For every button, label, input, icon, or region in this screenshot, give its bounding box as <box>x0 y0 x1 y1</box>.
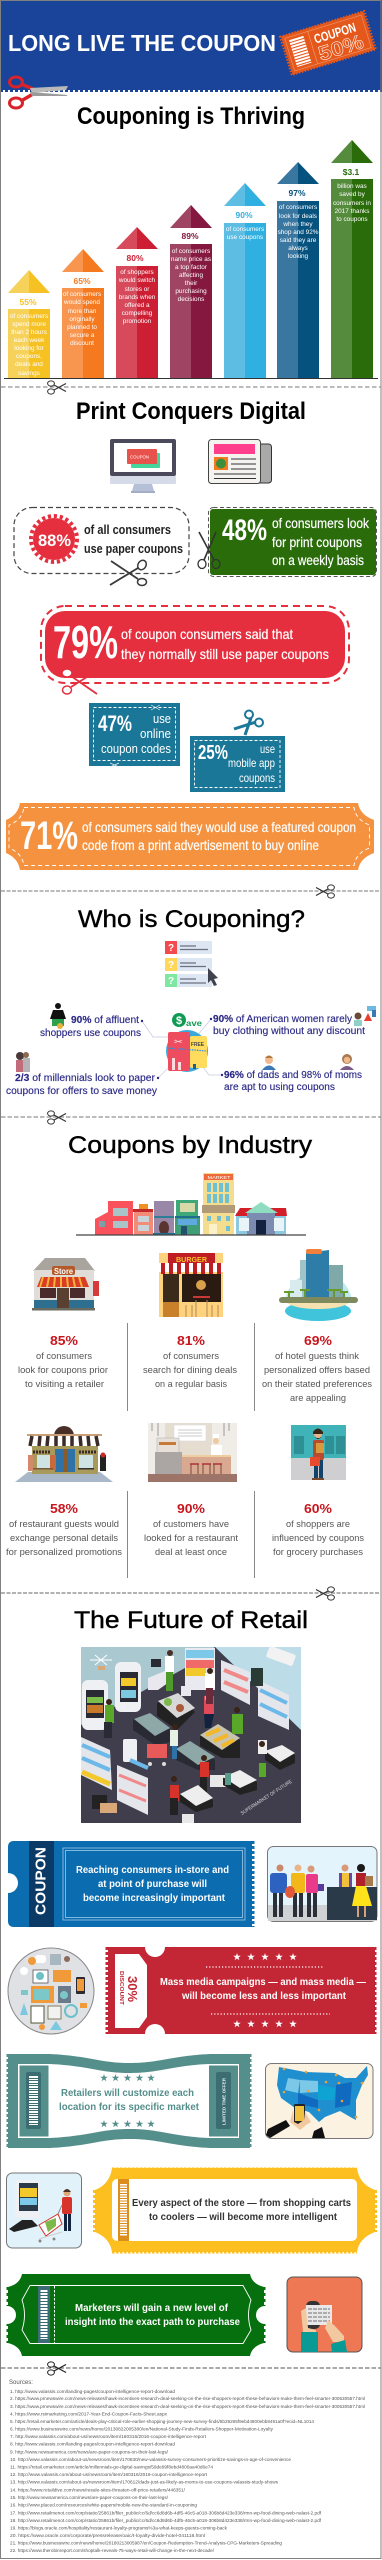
sources: 8. http://www.valassis.com/landing-pages/coupon-intelligence-report-download <box>10 2442 175 2446</box>
icon: scissors divider 5 <box>48 2362 66 2375</box>
heading: Couponing is Thriving: Couponing is Thriving <box>77 103 305 130</box>
arrow: 89%: decisions <box>178 296 204 303</box>
callout: 47%: use <box>153 711 171 726</box>
icon: dad <box>262 1056 276 1070</box>
sources: 12. http://www.valassis.com/about-us/newsroom/item/160316/2016-coupon-intelligence-report <box>10 2472 208 2477</box>
text: millennials: 2/3 of millennials look to paper <box>15 1073 156 1084</box>
ticket: marketers <box>0 2274 274 2356</box>
callout: 79%: 79% <box>53 616 118 668</box>
image: smart cooler with cart <box>6 2173 82 2248</box>
arrow: 90%: 90% <box>235 210 253 220</box>
callout: 71%: code from a print advertisement to buy online <box>82 837 319 853</box>
callout: 88%: of all consumers <box>84 522 171 537</box>
callout: 48% <box>208 508 376 576</box>
stat: 81%: of consumers <box>163 1351 219 1362</box>
icon: millennial couple <box>16 1052 30 1072</box>
image: future supermarket: SUPERMARKET OF FUTURE <box>240 1779 294 1817</box>
stat: 85%: 85% <box>50 1333 78 1348</box>
icon: save coupons circle: $ <box>176 1015 182 1027</box>
sources: 7. http://www.valassis.com/about-us/newsroom/item/160316/2016-coupon-intelligence-report <box>10 2434 207 2439</box>
callout: 47%: coupon codes <box>101 741 171 756</box>
ticket: retailers: location for its specific market <box>59 2101 199 2113</box>
callout: 25% <box>190 736 285 792</box>
arrow: 55%: than 2 hours <box>11 329 47 336</box>
callout: 47%: online <box>140 726 171 741</box>
text: American women <box>210 1014 365 1037</box>
arrow: 89%: 89% <box>181 231 199 241</box>
arrow: 89% <box>170 205 212 378</box>
ticket: mass media: 30% <box>125 1976 140 2002</box>
sources: Sources: <box>9 2379 33 2386</box>
connectors <box>142 1019 222 1078</box>
sources: 11. https://retail.emarketer.com/article/millennials-go-digital-savings/59de99f8ebd4800aa40d6e74 <box>10 2464 213 2470</box>
stat: 69%: on their stated preferences <box>262 1379 372 1390</box>
text: affluent shoppers: shoppers use coupons <box>40 1028 141 1039</box>
stat: 58% <box>6 1501 122 1558</box>
heading: Print Conquers Digital: Print Conquers Digital <box>76 398 306 425</box>
text: dads and moms: 96% of dads and 98% of moms <box>224 1070 362 1081</box>
sources: 21. https://www.businesswire.com/news/home/20180213005987/en/Coupon-Redemption-Trend-Analysis-CPG-Marketers-Spreading <box>10 2540 282 2546</box>
icon: street of shops: MARKET <box>208 1175 231 1180</box>
stat: 85%: of consumers <box>36 1351 92 1362</box>
stat: 69%: of hotel guests think <box>275 1351 359 1362</box>
text: affluent shoppers <box>40 1015 143 1039</box>
icon: blue scissors <box>234 710 263 735</box>
arrow: 89%: their <box>185 280 198 287</box>
icon: question list <box>165 941 218 987</box>
ticket: mass media <box>107 1937 375 2044</box>
icon: monitor <box>110 439 176 493</box>
stat: 90% restaurant: deal at least once <box>155 1547 227 1558</box>
image: checkout queue <box>268 1846 377 1922</box>
icon: cafe <box>15 1426 113 1482</box>
text: American women: buy clothing without any discount <box>213 1026 365 1037</box>
icon: mom <box>340 1054 354 1070</box>
ticket: every aspect: to coolers — will become more intelligent <box>149 2211 337 2223</box>
stat: 81% <box>143 1333 237 1390</box>
callout: 79%: they normally still use paper coupons <box>121 646 329 662</box>
arrow: 97%: said they are <box>280 237 317 244</box>
icon: scissors divider 1 <box>48 381 66 394</box>
icon: store: Store <box>54 1267 74 1276</box>
ticket: reaching consumers: COUPON <box>32 1847 49 1915</box>
stat: 60%: for grocery purchases <box>273 1547 363 1558</box>
icon: scissors divider 3 <box>48 1111 66 1124</box>
arrow: 89%: purchasing <box>175 288 207 295</box>
arrow: 90%: use coupons <box>227 234 263 241</box>
icon: question list: ? <box>168 976 174 987</box>
sources: 3. https://www.prnewswire.com/news-releases/hawk-incentives-research-deal-seeking-on-the-rise-shoppers-report-these-behaviors-make-them-feel-smarter-300530557.html <box>10 2404 365 2409</box>
ticket: reaching consumers: at point of purchase will <box>98 1878 207 1890</box>
icon: street of shops <box>76 1173 306 1235</box>
callout: 25%: 25% <box>198 742 228 764</box>
arrow: 65%: more than <box>68 308 97 315</box>
text: affluent shoppers: 90% of affluent <box>71 1015 139 1026</box>
arrow: 90%: of consumers <box>226 226 264 233</box>
callout: 48%: 48% <box>222 514 267 547</box>
ticket: reaching consumers: Reaching consumers in-store and <box>76 1864 229 1876</box>
icon: save coupons circle: ✂ <box>174 1039 183 1046</box>
icon: orange coupon ticket: 50% <box>316 31 367 66</box>
icon: hotel <box>279 1249 358 1321</box>
icon: red scissors <box>10 77 68 108</box>
text: millennials <box>6 1073 159 1097</box>
icon: question list: ? <box>168 960 174 971</box>
icon: scissors on green box <box>198 532 220 568</box>
stat: 90% restaurant: of customers have <box>153 1519 229 1530</box>
icon: red scissors outline <box>62 669 98 694</box>
arrow: 55%: coupons, <box>16 353 42 360</box>
sources: 18. http://www.retailmenot.com/corp/static/25861b/filer_public/cc/6d/cc6d8d6b-4df5-46c5-a018-306b8d423e338/rmn-wp-food-dining-web-nalast-2.pdf <box>10 2518 322 2523</box>
stat: 69%: personalized offers based <box>264 1365 370 1376</box>
arrow: 97%: when they <box>282 221 313 228</box>
icon: scissors divider 2 <box>316 885 334 898</box>
stat: 58%: of restaurant guests would <box>9 1519 119 1530</box>
stat: 60%: influenced by coupons <box>272 1533 364 1544</box>
ticket: every aspect: Every aspect of the store — from shopping carts <box>132 2197 351 2209</box>
sources: 10. http://www.valassis.com/about-us/newsroom/item/170830/new-valassis-survey-consumers-prioritize-savings-in-age-of-convenience <box>10 2457 291 2462</box>
arrow: 65%: would spend <box>63 299 100 306</box>
arrow: $3.1: consumers in <box>333 200 371 207</box>
image: US map with phone <box>266 2064 373 2138</box>
callout: 25%: coupons <box>239 771 275 785</box>
icon: burger shop: BURGER <box>176 1255 208 1264</box>
ticket: mass media: will become less and less important <box>181 1990 346 2002</box>
arrow: 90% <box>224 183 266 378</box>
arrow: 65%: secure a <box>70 332 95 339</box>
arrow: $3.1: to coupons <box>336 216 368 223</box>
arrow: 97%: shop and 92% <box>278 229 319 236</box>
stat: 58%: exchange personal details <box>10 1533 118 1544</box>
stat: 85%: look for coupons prior <box>18 1365 108 1376</box>
stat: 90% restaurant <box>144 1501 238 1558</box>
ticket: retailers: Retailers will customize each <box>61 2087 194 2099</box>
ticket: reaching consumers: become increasingly important <box>83 1892 225 1904</box>
text: dads and moms: are apt to using coupons <box>224 1082 335 1093</box>
arrow: 55% <box>8 270 50 378</box>
arrow: 55%: savings <box>18 370 40 377</box>
arrow: $3.1: $3.1 <box>343 167 360 177</box>
sources: 14. https://www.retaildive.com/news/resale-sites-threaten-off-price-retailers/446351/ <box>10 2488 186 2492</box>
icon: scissors divider 4 <box>316 1587 334 1600</box>
stat: 81%: on a regular basis <box>155 1379 227 1390</box>
title: LONG LIVE THE COUPON <box>8 30 276 56</box>
arrow: 55%: each week <box>14 337 45 344</box>
badge: 88%: 88% <box>38 531 71 550</box>
callout: 79% <box>41 606 349 694</box>
arrow: 80%: promotion <box>123 318 152 325</box>
icon: store <box>32 1258 99 1310</box>
ticket: every aspect <box>94 2168 376 2252</box>
image: media circle <box>8 1948 94 2034</box>
badge: 88% <box>31 516 77 562</box>
arrow: 65%: of consumers <box>63 291 101 298</box>
icon: scissors dark below 88% box <box>110 559 148 586</box>
icon: orange coupon ticket <box>280 11 376 75</box>
image: phone in hands <box>287 2277 362 2352</box>
arrow: 89%: a top factor <box>175 264 208 271</box>
callout: 25%: mobile app <box>228 756 275 770</box>
stat: 60% <box>272 1501 364 1558</box>
header banner <box>0 0 382 91</box>
arrow: 89%: of consumers <box>172 248 210 255</box>
arrow: 97% <box>277 162 319 378</box>
sources: 17. http://www.retailmenot.com/corp/static/25861b/filer_public/cc/6d/cc6d8d6b-4df5-46c5-a018-306b8d423e338/rmn-wp-food-dining-web-nalast-2.pdf <box>10 2510 322 2516</box>
stat: 58%: for personalized promotions <box>6 1547 122 1558</box>
ticket: retailers: LIMITED TIME OFFER <box>222 2077 226 2125</box>
icon: shopper <box>291 1425 346 1480</box>
arrow: 65% <box>62 249 104 378</box>
sources: 6. https://www.businesswire.com/news/home/20130822005380/en/National-Study-Finds-Retailers-Shopper-Motivation-Loyalty <box>10 2426 274 2432</box>
stat: 90% restaurant: 90% <box>177 1501 205 1516</box>
sources <box>9 2379 365 2553</box>
ticket: reaching consumers <box>0 1841 253 1927</box>
stat: 81%: 81% <box>177 1333 205 1348</box>
sources: 4. https://www.rsimarketing.com/2017-Year-End-Coupon-Facts-Sheet.aspx <box>10 2412 168 2416</box>
ticket: marketers: Marketers will gain a new level of <box>75 2302 228 2314</box>
arrow: 80%: 80% <box>126 253 144 263</box>
stat: 60%: of shoppers are <box>286 1519 350 1530</box>
arrow: 55%: deals and <box>15 361 43 368</box>
icon: orange coupon ticket: COUPON <box>312 20 358 47</box>
arrow: 80%: brands when <box>119 294 156 301</box>
sources: 16. http://www.placed.com/resources/white-papers/mobile-new-the-standard-in-couponing <box>10 2502 197 2508</box>
sources: 13. http://www.valassis.com/about-us/newsroom/item/170612/dads-just-as-likely-as-moms-to-use-coupons-valassis-study-shows <box>10 2480 279 2484</box>
stat: 69%: 69% <box>304 1333 332 1348</box>
arrow: 65%: discount <box>70 340 94 347</box>
heading: Coupons by Industry: Coupons by Industry <box>68 1132 312 1159</box>
stat: 69%: are appealing <box>290 1393 346 1404</box>
arrow: 65%: originally <box>69 316 95 323</box>
callout: 88%: use paper coupons <box>84 541 183 556</box>
stat: 58%: 58% <box>50 1501 78 1516</box>
heading: The Future of Retail: The Future of Retail <box>74 1607 308 1634</box>
callout: 25%: use <box>260 742 275 756</box>
arrow: 97%: look for deals <box>279 213 317 220</box>
arrow: 80%: offered a <box>124 302 150 309</box>
arrow: 97%: 97% <box>288 188 306 198</box>
icon: burger shop <box>159 1253 223 1317</box>
sources: 22. https://www.therobinreport.com/shoptalk-reveals-75-ways-retail-will-change-in-the-next-decade/ <box>10 2548 215 2553</box>
arrow: 65%: planned to <box>67 324 97 331</box>
ticket: mass media: DISCOUNT <box>118 1971 124 2006</box>
icon: kitchen <box>148 1423 237 1482</box>
arrow: 55%: spend more <box>12 321 46 328</box>
callout: 71% <box>6 803 374 870</box>
icon: save coupons circle: ave <box>186 1018 202 1028</box>
text: millennials: coupons for offers to save money <box>6 1086 157 1097</box>
arrow: 80%: of shoppers <box>120 269 154 276</box>
arrow: 80% <box>116 227 158 378</box>
chart: rising arrows <box>4 140 378 378</box>
stat: 85%: to visiting a retailer <box>25 1379 104 1390</box>
stat: 90% restaurant: looked for a restaurant <box>144 1533 238 1544</box>
arrow: $3.1 <box>331 140 373 378</box>
icon: woman and clothes <box>354 1006 376 1026</box>
callout: 88% <box>14 508 189 574</box>
arrow: $3.1: saved by <box>339 191 366 198</box>
sources: 15. http://www.newsamerica.com/news/are-paper-coupons-on-their-last-legs/ <box>10 2495 169 2500</box>
sources: 1. http://www.valassis.com/landing-pages/coupon-intelligence-report-download <box>10 2389 175 2394</box>
icon: save coupons circle: FREE <box>191 1042 205 1048</box>
callout: 48%: on a weekly basis <box>272 552 364 568</box>
arrow: 55%: looking for <box>14 345 45 352</box>
icon: affluent man <box>50 1003 66 1029</box>
heading: Who is Couponing?: Who is Couponing? <box>78 906 305 933</box>
arrow: 80%: compelling <box>122 310 153 317</box>
arrow: 55%: of consumers <box>10 313 48 320</box>
ticket: retailers <box>8 2054 250 2148</box>
text: dads and moms <box>221 1070 362 1093</box>
icon: save coupons circle <box>166 1013 208 1072</box>
sources: 9. http://www.newsamerica.com/news/are-paper-coupons-on-their-last-legs/ <box>10 2450 169 2454</box>
arrow: 97%: always <box>288 245 308 252</box>
stat: 85% <box>18 1333 108 1390</box>
arrow: $3.1: 2017 thanks <box>335 208 369 215</box>
callout: 48%: for print coupons <box>272 534 362 550</box>
callout: 71%: 71% <box>20 814 78 858</box>
icon: question list: ? <box>168 943 174 954</box>
stat: 81%: search for dining deals <box>143 1365 237 1376</box>
arrow: 97%: looking <box>288 253 309 260</box>
image: future supermarket <box>81 1646 301 1823</box>
arrow: 80%: would switch <box>118 277 156 284</box>
text: American women: 90% of American women rarely <box>213 1014 352 1025</box>
stat: 69% <box>262 1333 372 1404</box>
arrow: $3.1: billion was <box>337 183 367 190</box>
ticket: mass media: Mass media campaigns — and mass media — <box>160 1976 366 1988</box>
stat: 60%: 60% <box>304 1501 332 1516</box>
sources: 19. https://blogs.oracle.com/hospitality/restaurant-loyalty-programs%3a-what-keeps-guests-coming-back <box>10 2526 228 2530</box>
arrow: 80%: stores or <box>125 286 150 293</box>
sources: 20. https://www.oracle.com/corporate/pressrelease/oaic/t-loyalty-divide-hotel-041118.html <box>10 2533 205 2538</box>
ticket: marketers: insight into the exact path to purchase <box>65 2316 240 2328</box>
icon: monitor: COUPON <box>130 454 149 460</box>
callout: 47% <box>89 703 180 767</box>
arrow: 89%: name price as <box>171 256 211 263</box>
arrow: 65%: 65% <box>73 276 91 286</box>
callout: 47%: 47% <box>98 711 132 736</box>
arrow: 89%: affecting <box>179 272 203 279</box>
sources: 2. https://www.prnewswire.com/news-releases/hawk-incentives-research-deal-seeking-on-the-rise-shoppers-report-these-behaviors-make-them-feel-smarter-300530557.html <box>10 2396 365 2401</box>
sources: 5. https://retail.emarketer.com/article/deals-play-critical-role-earlier-shopping-journey-new-survey-finds/5b29265f9ebd4800ebb8491a0f?ecid=NL1014 <box>10 2419 314 2424</box>
callout: 79%: of coupon consumers said that <box>121 626 293 642</box>
arrow: 97%: of consumers <box>279 204 317 211</box>
arrow: 55%: 55% <box>19 297 37 307</box>
icon: newspaper <box>208 440 272 484</box>
